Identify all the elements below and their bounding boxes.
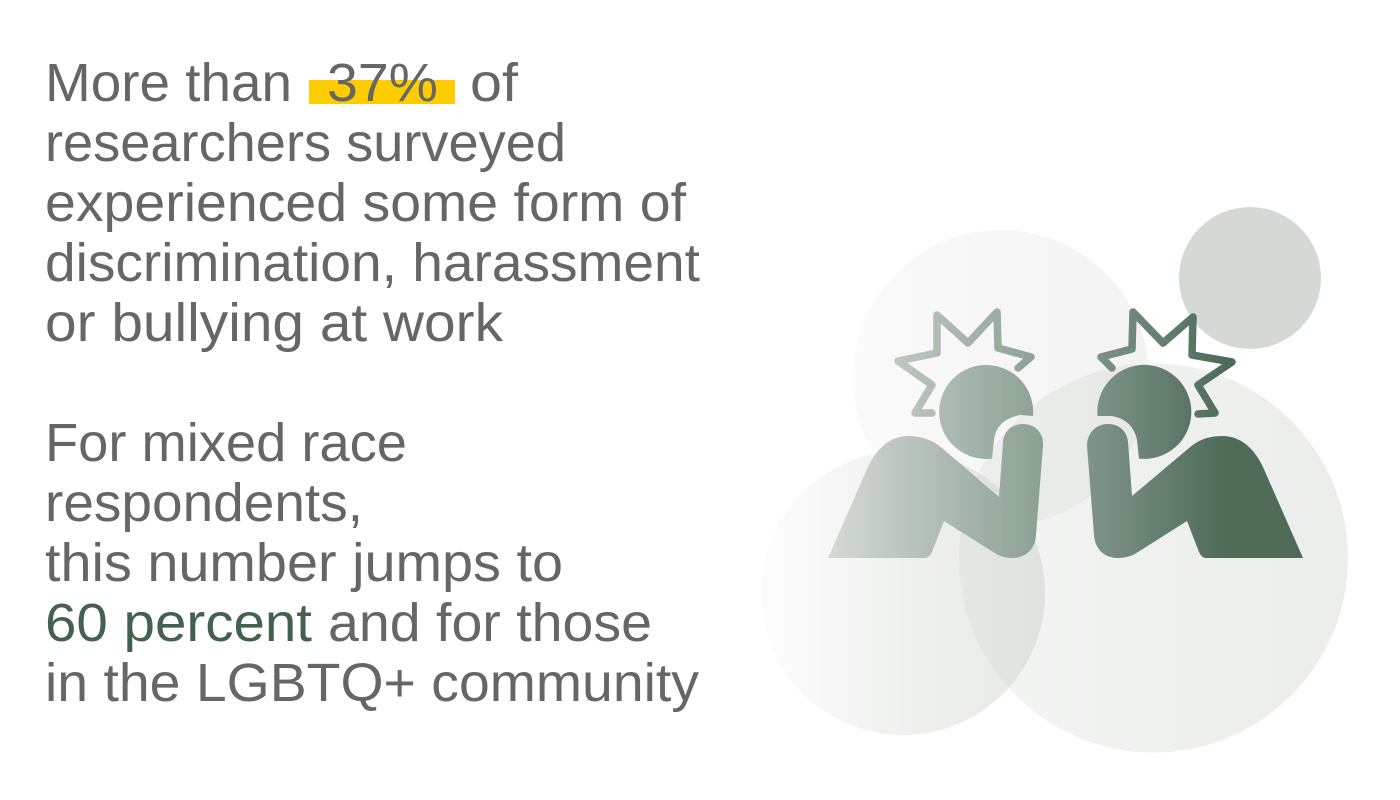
circle: top left (853, 230, 1149, 526)
line: researchers surveyed: researchers surveyed (45, 113, 566, 173)
circle: bottom right (959, 364, 1348, 752)
line: More than 37% of: 37% (327, 53, 438, 113)
icon: left figure with burst (828, 312, 1043, 558)
circle: bottom left (761, 451, 1045, 735)
body and arm (1087, 424, 1303, 558)
burst lines (1101, 312, 1232, 414)
line: More than 37% of (45, 53, 519, 113)
line: 60 percent and for those: and for those (328, 593, 652, 653)
line: or bullying at work: or bullying at work (45, 293, 504, 353)
body and arm (828, 424, 1043, 558)
line: discrimination, harassment: discrimination, harassment (45, 233, 700, 293)
line: experienced some form of: experienced some form of (45, 173, 687, 233)
line: respondents,: respondents, (45, 473, 363, 533)
icon: right figure with burst (1087, 312, 1303, 558)
line: For mixed race: For mixed race (45, 413, 407, 473)
line: More than 37% of: More than (45, 53, 292, 113)
line: More than 37% of: of (470, 53, 519, 113)
text block: second statistic (45, 413, 699, 713)
line: 60 percent and for those (45, 593, 652, 653)
highlight behind 37% (309, 80, 455, 104)
burst lines (898, 312, 1031, 413)
background circles (761, 207, 1348, 752)
line: this number jumps to: this number jumps to (45, 533, 563, 593)
head (939, 365, 1033, 459)
circle: top right (1179, 207, 1321, 349)
text block: first statistic (45, 53, 700, 353)
head (1097, 365, 1191, 459)
line: in the LGBTQ+ community: in the LGBTQ+ community (45, 653, 699, 713)
line: 60 percent and for those: 60 percent (45, 593, 312, 653)
